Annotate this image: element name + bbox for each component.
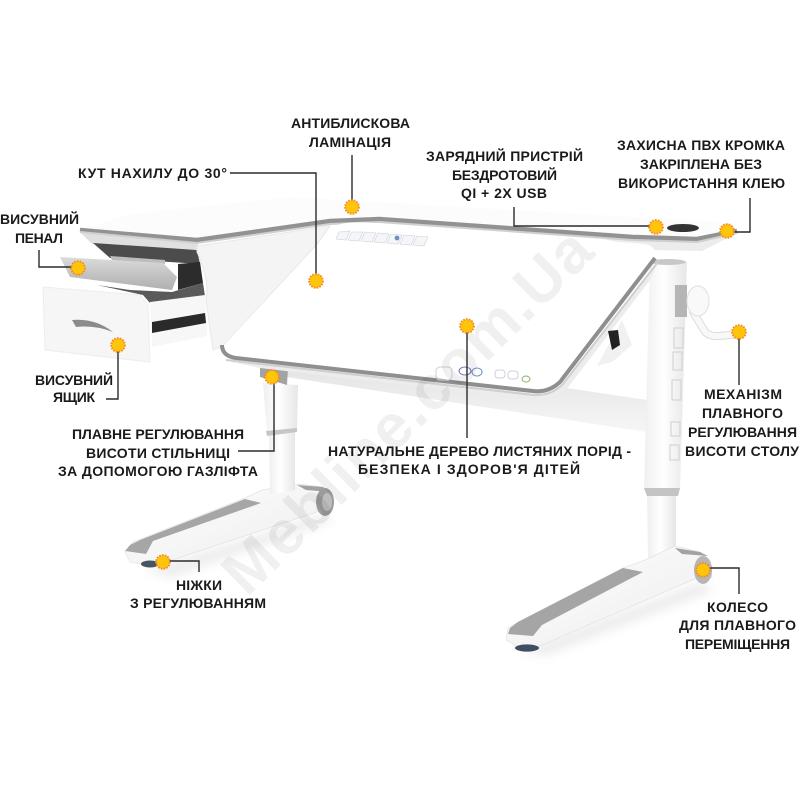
label: height mechanism: ПЛАВНОГО (702, 405, 783, 421)
drawer box (150, 295, 207, 347)
label: drawer: ЯЩИК (53, 389, 95, 405)
label: height mechanism: РЕГУЛЮВАННЯ (688, 424, 797, 440)
label: adjustable feet: З РЕГУЛЮВАННЯМ (130, 595, 266, 611)
label: wheel (679, 599, 796, 652)
label: wireless charger: ЗАРЯДНИЙ ПРИСТРІЙ (426, 147, 583, 164)
label: wireless charger: QI + 2X USB (461, 185, 547, 201)
label: gas lift (58, 426, 258, 479)
label: wireless charger (426, 147, 583, 201)
label: gas lift: ЗА ДОПОМОГОЮ ГАЗЛІФТА (58, 463, 258, 479)
drawer front (43, 287, 150, 362)
column marks (670, 328, 683, 460)
label: tilt angle: КУТ НАХИЛУ ДО 30° (78, 165, 227, 181)
desk illustration (43, 197, 738, 656)
label: pencil tray: ВИСУВНИЙ (0, 210, 79, 227)
leader lines (39, 155, 750, 594)
label: natural wood (328, 443, 631, 477)
drawer unit (43, 243, 207, 362)
watermark: Mebline.com.Ua (208, 215, 607, 608)
label: wheel: КОЛЕСО (707, 599, 768, 615)
label: wheel: ДЛЯ ПЛАВНОГО (679, 617, 796, 633)
label: gas lift: ПЛАВНЕ РЕГУЛЮВАННЯ (72, 426, 244, 442)
crossbar (280, 345, 647, 432)
marker suns (71, 200, 746, 577)
label: natural wood: НАТУРАЛЬНЕ ДЕРЕВО ЛИСТЯНИХ ПОРІД - (328, 443, 631, 459)
right leg (506, 259, 712, 652)
label: anti-glare lamination: АНТИБЛИСКОВА (291, 115, 410, 131)
label: anti-glare lamination (291, 115, 410, 150)
tilt mechanism (597, 320, 632, 366)
label: PVC edge (617, 137, 785, 191)
label: gas lift: ВИСОТИ СТІЛЬНИЦІ (86, 445, 230, 461)
side bracket (197, 226, 330, 350)
label: adjustable feet (130, 577, 266, 611)
tilted desktop board (222, 222, 658, 400)
label: adjustable feet: НІЖКИ (176, 577, 222, 593)
label: drawer (35, 371, 113, 405)
label: wireless charger: БЕЗДРОТОВИЙ (452, 166, 557, 183)
label: drawer: ВИСУВНИЙ (35, 371, 113, 388)
label: pencil tray: ПЕНАЛ (15, 230, 63, 246)
label: natural wood: БЕЗПЕКА І ЗДОРОВ'Я ДІТЕЙ (358, 460, 580, 477)
tabletop back and left wing (80, 197, 737, 251)
stickers: bottom row (436, 367, 530, 382)
label: height mechanism: ВИСОТИ СТОЛУ (685, 443, 799, 459)
crank handle (675, 285, 738, 336)
label: pencil tray (0, 210, 79, 246)
floor shadows (145, 515, 715, 656)
left leg (125, 365, 334, 568)
label: PVC edge: ВИКОРИСТАННЯ КЛЕЮ (618, 175, 785, 191)
pencil tray (60, 257, 177, 290)
label: anti-glare lamination: ЛАМІНАЦІЯ (309, 134, 391, 150)
sticker accent (395, 236, 399, 240)
label: PVC edge: ЗАХИСНА ПВХ КРОМКА (617, 137, 785, 153)
stickers: top row (336, 231, 428, 246)
label: wheel: ПЕРЕМІЩЕННЯ (685, 636, 790, 652)
label: height mechanism: МЕХАНІЗМ (704, 386, 782, 402)
label: PVC edge: ЗАКРІПЛЕНА БЕЗ (640, 156, 762, 172)
label: height mechanism (685, 386, 799, 459)
